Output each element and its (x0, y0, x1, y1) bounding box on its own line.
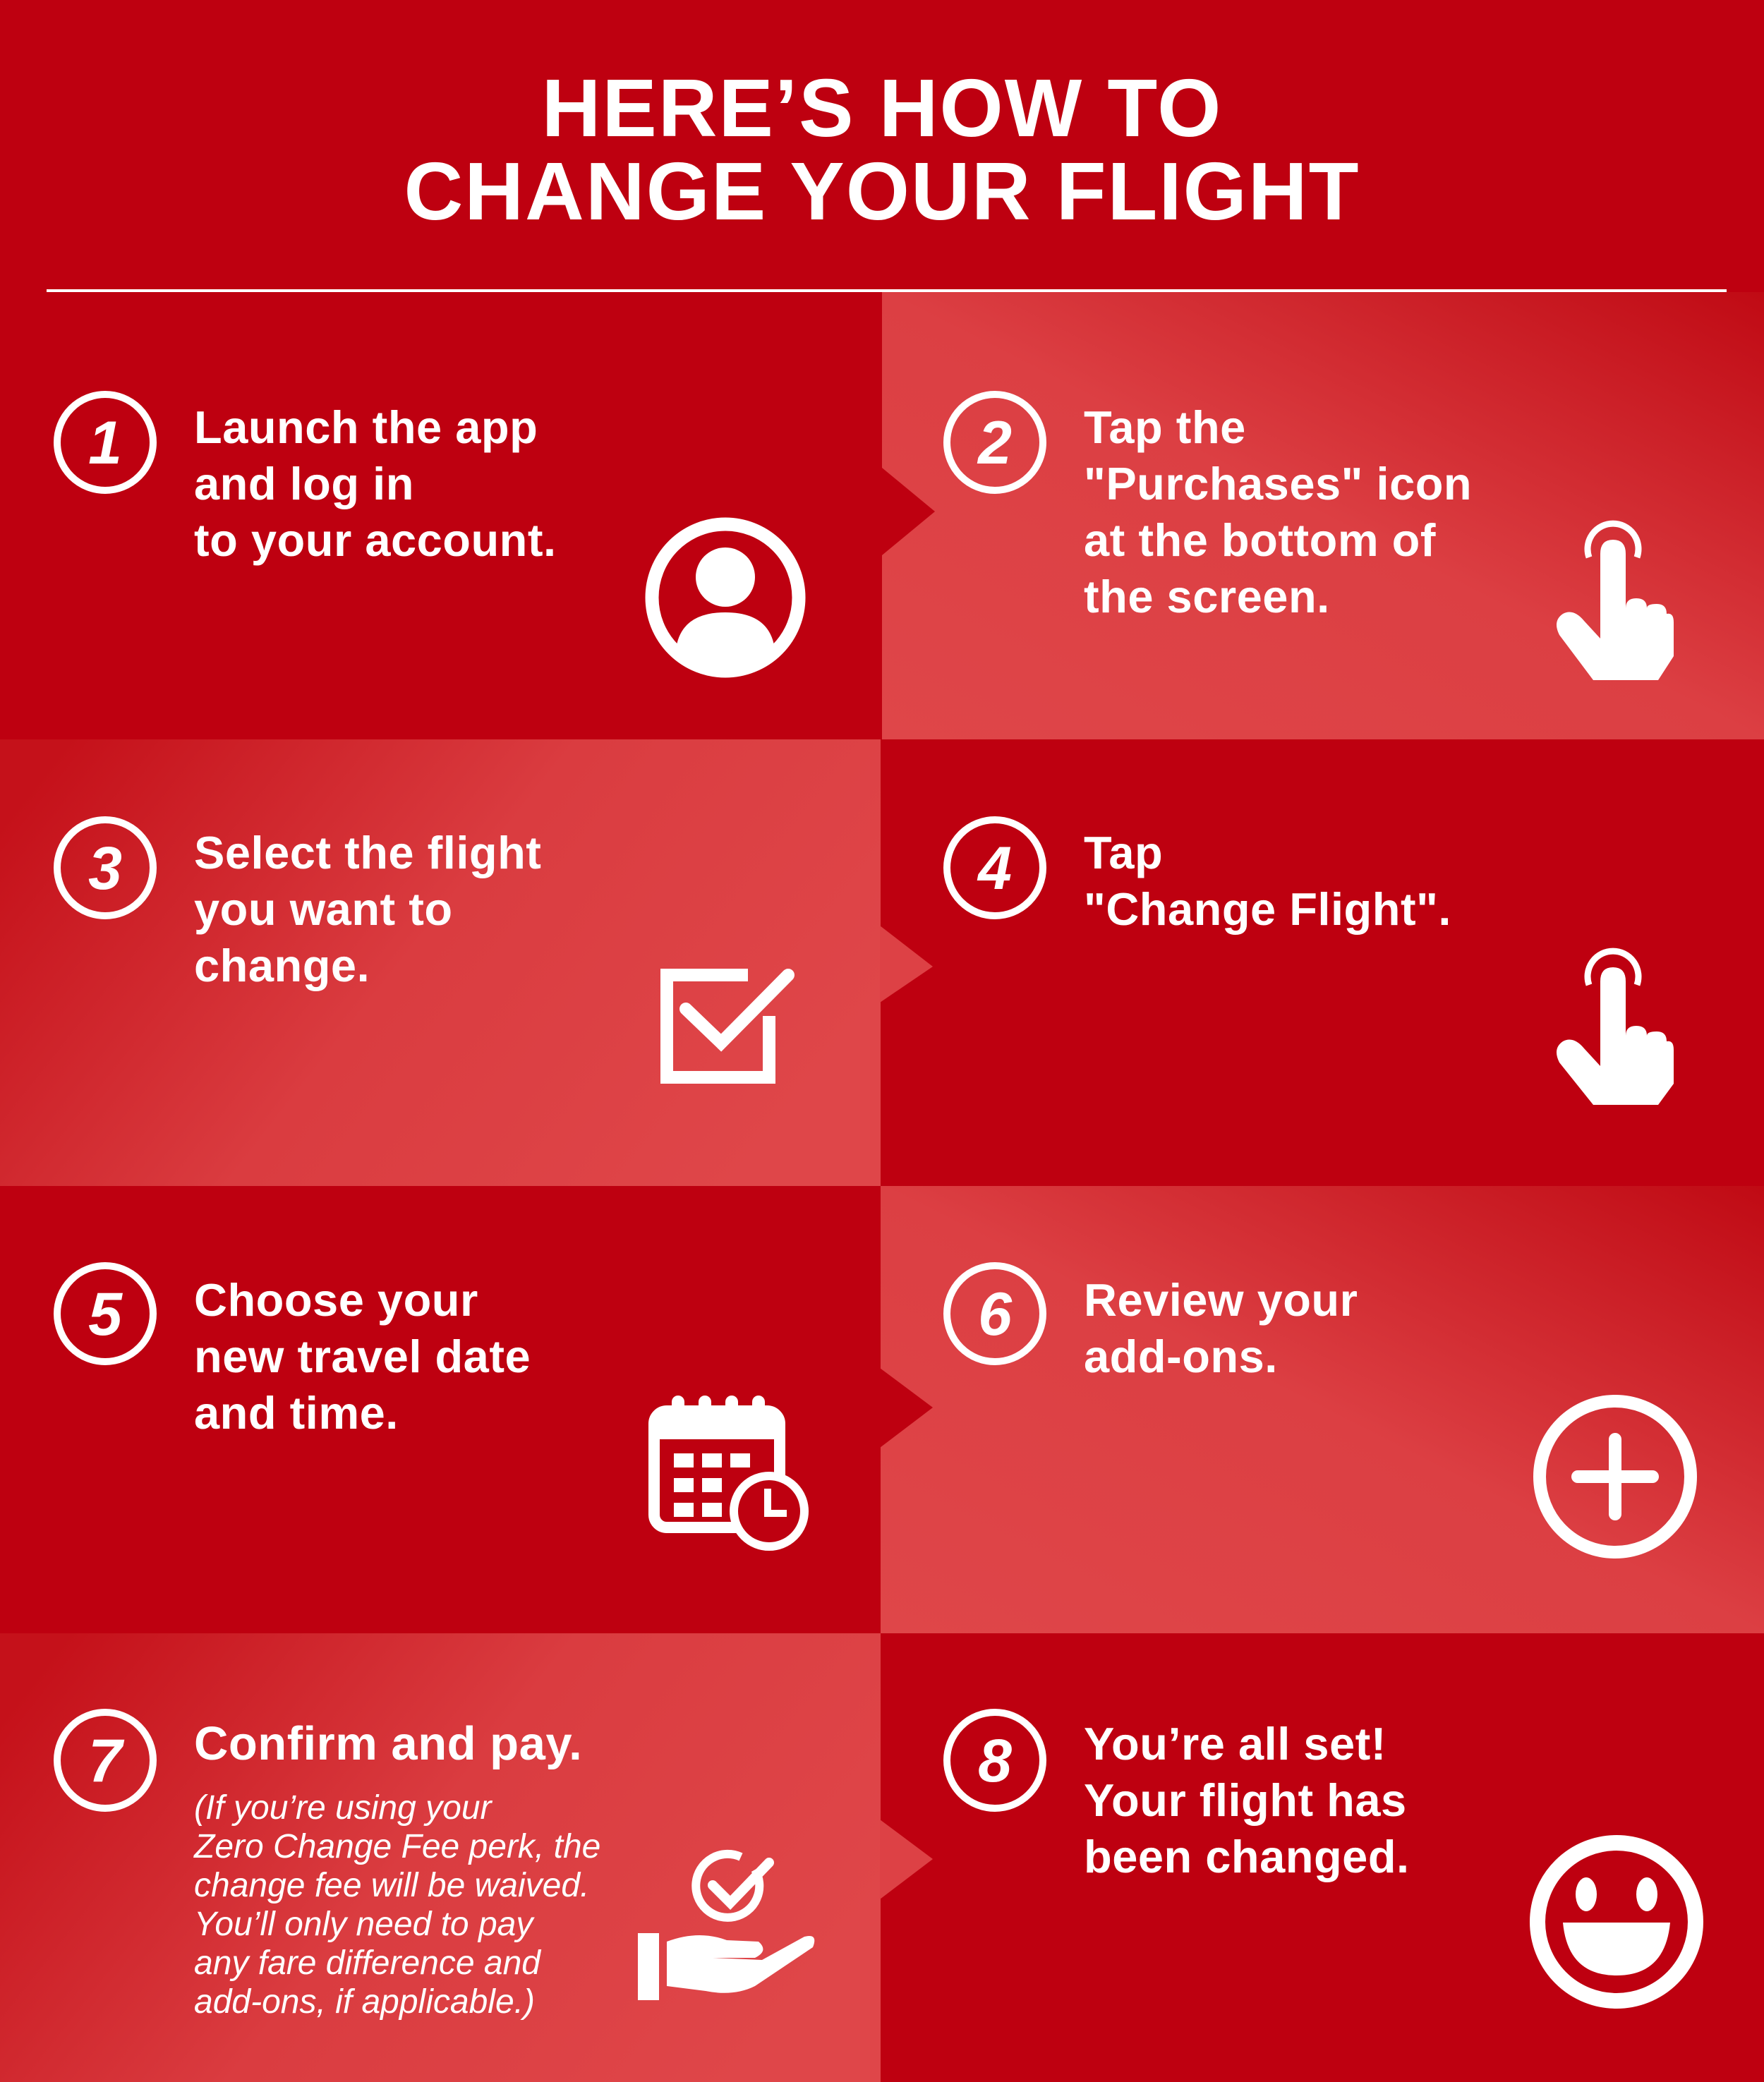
numbers: 7 (88, 1727, 125, 1795)
divider (47, 289, 1727, 292)
text: step 2: Tap the (1084, 401, 1246, 453)
text: step 4 (1084, 827, 1451, 935)
text: step 1: Launch the app (194, 401, 538, 453)
text: step 1: and log in (194, 458, 414, 509)
text: step 3: Select the flight (194, 827, 541, 878)
icon: calendar (654, 1396, 804, 1547)
icon: hand pointer step 2 (1557, 523, 1674, 680)
text: step 3 (194, 827, 541, 991)
arrow: step 5 to 6 (880, 1368, 933, 1448)
text: step 8 (1084, 1718, 1410, 1882)
numbers: 5 (88, 1281, 123, 1348)
text: step 6: Review your (1084, 1274, 1358, 1326)
text: step 3: change. (194, 940, 370, 991)
text: step 5: new travel date (194, 1331, 531, 1382)
numbers: 8 (978, 1727, 1012, 1795)
title (404, 62, 1360, 237)
text: step 7 (193, 1717, 600, 2021)
panel: step 7 background (0, 1633, 933, 2082)
text: step 2: the screen. (1084, 571, 1330, 622)
icon: checkbox (667, 975, 788, 1077)
text: step 5 (194, 1274, 531, 1439)
text: step 4: "Change Flight". (1084, 883, 1451, 935)
text: step 1: to your account. (194, 514, 557, 566)
note: fee waiver: You’ll only need to pay (194, 1906, 533, 1943)
text: step 4: Tap (1084, 827, 1163, 878)
note: fee waiver: change fee will be waived. (194, 1867, 589, 1904)
numbers: 4 (977, 835, 1012, 902)
title: CHANGE YOUR FLIGHT (404, 145, 1360, 237)
text: step 8: You’re all set! (1084, 1718, 1387, 1769)
heading: confirm and pay: Confirm and pay. (194, 1717, 582, 1770)
number circles (57, 394, 1043, 1808)
icon: user (652, 524, 799, 671)
title: HERE’S HOW TO (542, 62, 1222, 154)
text: step 2: "Purchases" icon (1084, 458, 1472, 509)
icon: hand with check (638, 1854, 814, 2000)
note: fee waiver: (If you’re using your (194, 1789, 492, 1827)
arrow: step 1 to 2 (882, 468, 935, 555)
text: step 6: add-ons. (1084, 1331, 1278, 1382)
text: step 3: you want to (194, 883, 453, 935)
text: step 1 (194, 401, 557, 566)
text: step 6 (1084, 1274, 1358, 1382)
text: step 8: been changed. (1084, 1831, 1410, 1882)
text: step 5: Choose your (194, 1274, 478, 1326)
panel: step 2 background (882, 292, 1764, 739)
text: step 2: at the bottom of (1084, 514, 1436, 566)
note: fee waiver: any fare difference and (194, 1944, 540, 1982)
text: step 2 (1084, 401, 1472, 622)
numbers (88, 409, 1013, 1795)
numbers: 6 (978, 1281, 1013, 1348)
numbers: 2 (977, 409, 1012, 477)
text: step 5: and time. (194, 1387, 399, 1439)
panel: step 3 background (0, 739, 933, 1186)
icon: hand pointer step 4 (1557, 951, 1674, 1105)
numbers: 1 (88, 409, 122, 477)
note: fee waiver: add-ons, if applicable.) (194, 1983, 535, 2021)
icon: plus circle (1540, 1401, 1691, 1552)
text: step 8: Your flight has (1084, 1774, 1407, 1826)
numbers: 3 (88, 835, 122, 902)
note: fee waiver: Zero Change Fee perk, the (194, 1828, 600, 1865)
icon: smiley (1538, 1843, 1696, 2001)
note: fee waiver (193, 1789, 600, 2021)
panel: step 6 background (881, 1186, 1764, 1633)
